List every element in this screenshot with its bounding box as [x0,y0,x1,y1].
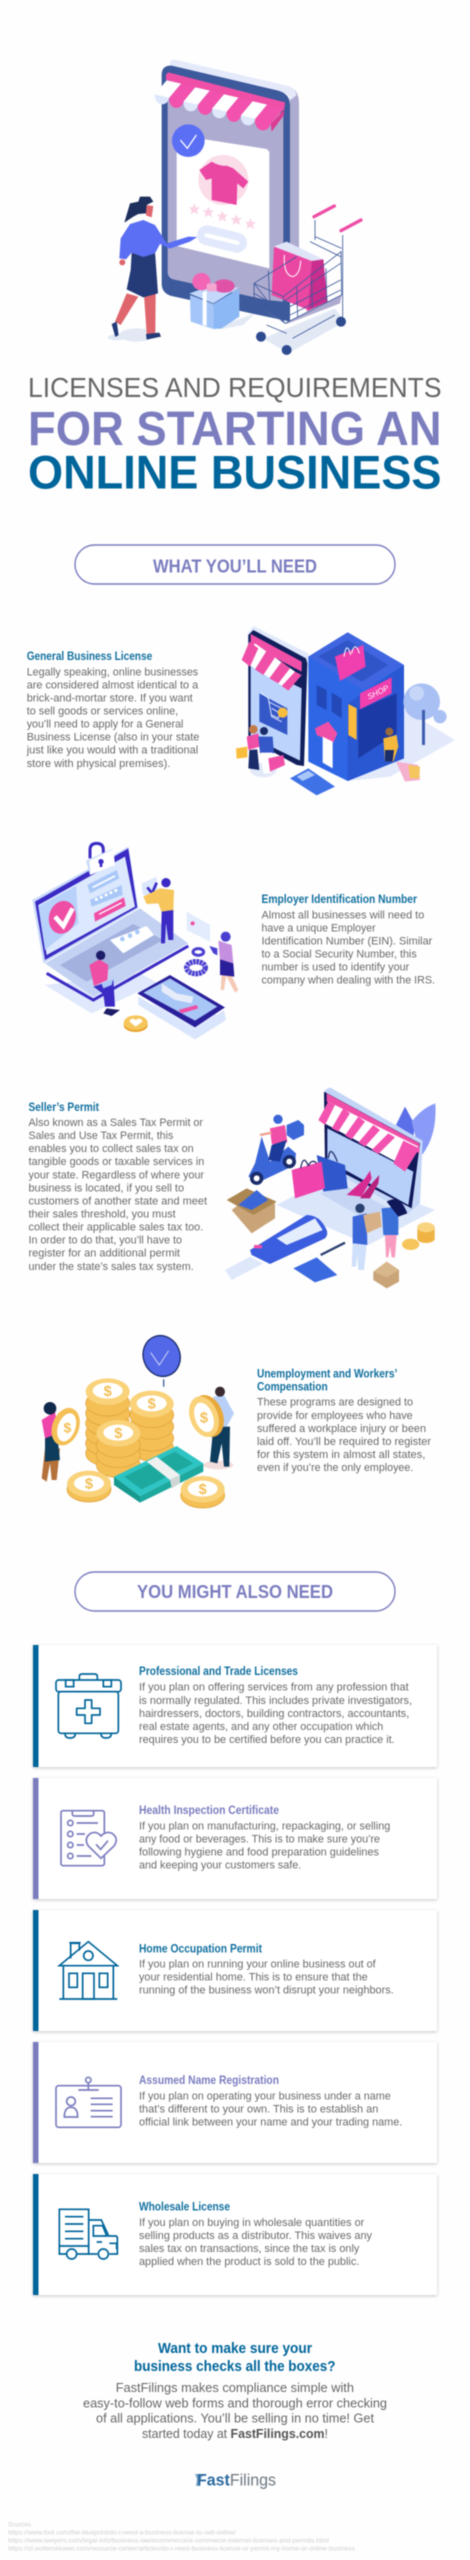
title [28,372,442,498]
illustration: laptop security scene [32,843,238,1039]
phone with key [137,975,226,1039]
illustration: online store with delivery and payment [225,1087,436,1288]
panel: general business license text: General Business License [27,651,152,663]
call to action [83,2340,387,2441]
shopping cart with bag [254,206,361,355]
card: wholesale license: If you plan on buying in wholesale quantities or [139,2217,365,2229]
panel: employer identification number text: Identification Number (EIN). Similar [262,935,433,947]
phone body [162,60,299,322]
card: home occupation permit: running of the business won’t disrupt your neighbors. [139,1984,394,1996]
tree [403,683,447,745]
character: sitting man [89,951,120,1016]
shoppers and credit card [236,725,420,795]
card: home occupation permit: If you plan on running your online business out of [139,1958,377,1970]
coin faces [74,1383,218,1497]
panel: seller's permit text: your state. Regardless of where your [28,1169,204,1181]
panel: general business license text: brick-and-mortar store. If you want [27,692,193,704]
character: woman pointing [112,197,197,340]
icon: medical kit [56,1674,121,1738]
card: assumed name registration: that’s different to your own. This is to establish an [139,2103,378,2115]
call to action: Want to make sure your [158,2340,312,2357]
panel: employer identification number text: number is used to identify your [262,962,410,974]
section pill: you might also need: YOU MIGHT ALSO NEED [137,1582,333,1602]
card: health inspection certificate: If you plan on manufacturing, repackaging, or selling [139,1820,390,1832]
character: woman with tablet and id card [187,912,238,993]
sources [8,2522,356,2552]
card: professional and trade licenses: hairdressers, doctors, building contractors, accountants, [139,1708,409,1720]
panel: employer identification number text: company when dealing with the IRS. [262,975,435,987]
panel: seller's permit text [28,1102,207,1273]
dollar signs [85,1384,207,1498]
laptop screen and awning [318,1087,423,1213]
panel: general business license text: are considered almost identical to a [27,679,199,691]
moped rider [248,1115,304,1185]
icon: id badge [56,2077,121,2127]
call to action: easy-to-follow web forms and thorough error checking [83,2395,387,2410]
dollar signs: $ [114,1426,122,1442]
character: man holding coin: $ [200,1411,208,1427]
panel: general business license text: just like you would with a traditional [26,745,198,757]
icon: house [59,1942,117,1999]
panel: unemployment and workers' compensation text: for this system in almost all states, [257,1449,425,1461]
dollar signs: $ [199,1482,207,1498]
panel: unemployment and workers' compensation text: laid off. You’ll be required to register [257,1436,431,1448]
cash bundle [114,1446,203,1503]
panel: general business license text: to sell goods or services online, [27,706,178,718]
card terminal and receipt [225,1215,345,1282]
card: health inspection certificate: Health Inspection Certificate [139,1805,279,1817]
sources: Sources [8,2522,32,2529]
gears [187,949,205,974]
card: assumed name registration: If you plan on operating your business under a name [139,2090,391,2102]
panel: seller's permit text: Sales and Use Tax Permit, this [28,1130,174,1142]
panel: unemployment and workers' compensation text: even if you’re the only employee. [257,1462,413,1474]
icon: delivery truck [59,2209,117,2259]
call to action: business checks all the boxes? [134,2358,336,2375]
illustration: phone storefront and shop building [236,626,455,795]
call to action: started today at FastFilings.com! [142,2426,328,2441]
card: health inspection certificate: any food or beverages. This is to make sure you’re [139,1833,380,1845]
call to action: FastFilings makes compliance simple with [116,2380,354,2395]
card: wholesale license: applied when the product is sold to the public. [139,2256,359,2268]
panel: employer identification number text: to a Social Security Number, this [262,948,417,960]
character: woman holding coin: $ [63,1419,71,1435]
card: professional and trade licenses: Professional and Trade Licenses [139,1666,298,1678]
panel: unemployment and workers' compensation text: Unemployment and Workers’ [257,1368,397,1380]
panel: seller's permit text: business is located, if you sell to [28,1182,184,1194]
panel: seller's permit text: customers of another state and meet [28,1195,207,1207]
dollar signs: $ [148,1397,156,1413]
card: wholesale license: selling products as a distributor. This waives any [139,2230,372,2242]
panel: unemployment and workers' compensation text: These programs are designed to [257,1397,413,1409]
icon: check badge [172,124,205,157]
shopping bags and shoes [292,1152,379,1198]
awning [155,72,285,132]
leaves [396,1103,436,1157]
card: professional and trade licenses: If you plan on offering services from any profession that [139,1682,409,1694]
logo: FastFilings: FastFilings [197,2470,276,2490]
coin stacks [67,1378,225,1508]
illustration: coin stacks, cash and two people [42,1330,234,1508]
panel: general business license text: Legally speaking, online businesses [27,666,199,678]
gift box [189,273,239,329]
card: health inspection certificate: and keeping your customers safe. [139,1860,301,1872]
panel: seller's permit text: under the state’s sales tax system. [28,1261,194,1273]
call to action: of all applications. You’ll be selling in no time! Get [96,2411,374,2426]
phone with awning [242,626,308,766]
dollar signs: $ [85,1477,93,1493]
sources: https://www.fool.com/the-blueprint/do-i-need-a-business-license-to-sell-online/ [8,2530,236,2537]
shop building: SHOP [366,683,391,701]
shop building [308,632,404,781]
title: ONLINE BUSINESS [28,446,442,498]
title: FOR STARTING AN [28,403,442,456]
panel: general business license text: store with physical premises). [27,758,170,770]
sources: https://ct.wolterskluwer.com/resource-center/articles/do-i-need-business-license-or-permit-my-home-or-online-business [8,2546,356,2552]
panel: unemployment and workers' compensation text: provide for employees who have [257,1410,413,1422]
character: woman holding coin [42,1402,85,1482]
card: assumed name registration: Assumed Name Registration [139,2075,279,2087]
icon: clipboard with heart [61,1811,116,1866]
section pill: what you'll need: WHAT YOU’LL NEED [153,556,317,576]
card: home occupation permit: Home Occupation Permit [139,1943,262,1955]
panel: unemployment and workers' compensation text [257,1368,431,1474]
panel: unemployment and workers' compensation text: Compensation [257,1382,328,1394]
title: LICENSES AND REQUIREMENTS [28,372,442,403]
section pill: what you'll need [75,545,395,584]
coins and boxes [373,1222,435,1288]
floor shadows [108,308,345,353]
card: professional and trade licenses: requires you to be certified before you can practice it. [139,1734,395,1746]
card: professional and trade licenses: is normally regulated. This includes private investigators, [139,1695,412,1707]
check bubble [137,1330,186,1387]
card: health inspection certificate: following hygiene and food preparation guidelines [139,1846,379,1858]
card: assumed name registration [33,2042,437,2163]
card: health inspection certificate [33,1778,437,1899]
card: wholesale license [33,2174,437,2295]
section pill: you might also need [75,1572,395,1611]
delivery handover characters [352,1199,407,1270]
panel: seller's permit text: collect their applicable sales tax too. [28,1222,203,1234]
panel: seller's permit text: In order to do that, you’ll have to [28,1235,182,1247]
panel: general business license text: you’ll need to apply for a General [27,719,183,731]
illustration: woman shopping on a giant phone [108,60,361,355]
panel: seller's permit text: tangible goods or taxable services in [28,1156,204,1168]
panel: seller's permit text: Also known as a Sales Tax Permit or [28,1117,203,1129]
panel: employer identification number text [262,894,435,987]
parcel box [227,1188,277,1233]
sources: https://www.lawyers.com/legal-info/business-law/ecommerce/e-commerce-internet-licenses-and-permits.html [8,2538,330,2545]
laptop screen [32,847,138,963]
panel: seller's permit text: their sales threshold, you must [28,1208,176,1220]
card: assumed name registration: official link between your name and your trading name. [139,2116,402,2128]
heart coin [124,1015,148,1032]
product: t-shirt with stars [189,155,256,255]
panel: unemployment and workers' compensation text: suffered a workplace injury or been [257,1423,426,1435]
laptop keyboard base [45,908,188,1000]
character: standing man with shield [142,877,174,943]
laptop base [277,1173,435,1245]
card: wholesale license: Wholesale License [139,2202,230,2214]
panel: seller's permit text: Seller’s Permit [28,1102,99,1114]
panel: general business license text [26,651,199,770]
card: home occupation permit: your residential home. This is to ensure that the [139,1971,368,1983]
panel: seller's permit text: enables you to collect sales tax on [28,1143,194,1155]
card: professional and trade licenses: real estate agents, and any other occupation which [139,1721,383,1733]
icon: padlock [86,843,115,875]
panel: general business license text: Business License (also in your state [27,732,199,744]
panel: employer identification number text: have a unique Employer [262,922,376,934]
character: man holding coin [184,1387,234,1469]
panel: seller's permit text: register for an additional permit [28,1248,180,1260]
panel: employer identification number text: Employer Identification Number [262,894,417,906]
card: home occupation permit [33,1910,437,2031]
card: wholesale license: sales tax on transactions, since the tax is only [139,2243,360,2255]
card: professional and trade licenses [33,1645,437,1767]
panel: employer identification number text: Almost all businesses will need to [262,909,424,921]
dollar signs: $ [104,1384,112,1400]
